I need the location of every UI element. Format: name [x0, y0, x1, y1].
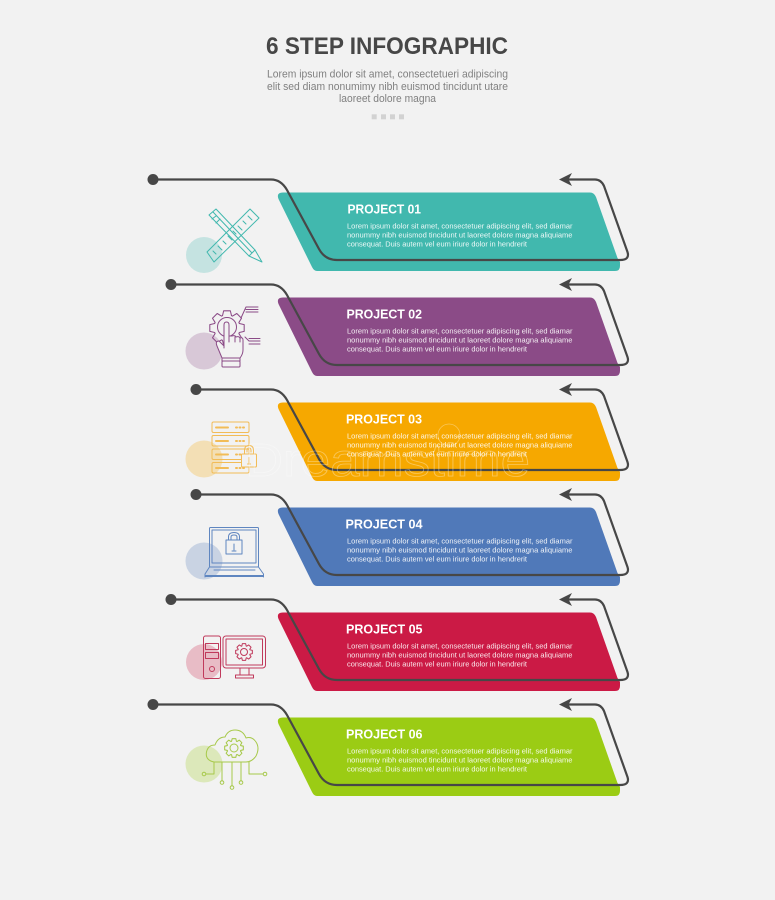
description: consequat. Duis autem vel eum iriure dolor in hendrerit	[347, 764, 527, 774]
title: 6 STEP INFOGRAPHIC	[266, 33, 508, 60]
icon: laptop with lock	[186, 528, 264, 580]
description	[347, 746, 573, 774]
connector line with arrow	[148, 173, 628, 260]
description: consequat. Duis autem vel eum iriure dolor in hendrerit	[347, 450, 527, 458]
subtitle text block: Lorem ipsum dolor sit amet, consectetueri adipiscing	[267, 68, 508, 80]
banner shape	[278, 192, 620, 271]
connector line with arrow	[166, 278, 628, 365]
banner shape	[278, 298, 620, 376]
description: nonummy nibh euismod tincidunt ut laoreet dolore magna aliquiame	[347, 650, 572, 660]
banner shape	[278, 718, 620, 796]
banner shape	[278, 612, 620, 691]
heading: PROJECT 05	[346, 622, 422, 636]
description: nonummy nibh euismod tincidunt ut laoreet dolore magna aliquiame	[347, 756, 572, 764]
pagination dots	[372, 114, 404, 119]
heading: PROJECT 04	[346, 516, 423, 532]
connector line with arrow	[166, 593, 628, 680]
connector line with arrow	[190, 488, 628, 575]
banner shape	[278, 508, 620, 586]
connector line with arrow	[148, 698, 628, 785]
description: nonummy nibh euismod tincidunt ut laoreet dolore magna aliquiame	[347, 230, 572, 240]
icon: desktop computer with gear	[186, 636, 266, 680]
panel: project 01	[148, 173, 628, 273]
icon: cloud circuit	[186, 730, 267, 789]
heading: PROJECT 03	[346, 412, 422, 426]
heading: PROJECT 02	[346, 306, 422, 322]
panel: project 05	[166, 593, 628, 691]
description: Lorem ipsum dolor sit amet, consectetuer adipiscing elit, sed diamar	[347, 536, 573, 546]
subtitle text block: laoreet dolore magna	[339, 93, 436, 105]
description	[347, 326, 573, 354]
description: consequat. Duis autem vel eum iriure dolor in hendrerit	[347, 660, 527, 668]
banner shape	[278, 402, 620, 481]
icon: server rack with lock	[186, 422, 256, 478]
description: Lorem ipsum dolor sit amet, consectetuer adipiscing elit, sed diamar	[347, 326, 573, 336]
description: consequat. Duis autem vel eum iriure dolor in hendrerit	[347, 554, 527, 564]
subtitle text block: elit sed diam nonumimy nibh euismod tincidunt utare	[267, 81, 508, 93]
description	[347, 222, 573, 248]
description	[347, 536, 573, 564]
heading: PROJECT 06	[346, 726, 422, 742]
description: nonummy nibh euismod tincidunt ut laoreet dolore magna aliquiame	[347, 546, 572, 554]
panel: project 02	[166, 278, 628, 376]
description: Lorem ipsum dolor sit amet, consectetuer adipiscing elit, sed diamar	[347, 432, 573, 440]
panel: project 04	[186, 488, 628, 586]
panel: project 06	[148, 698, 628, 796]
watermark: Dreamstime	[245, 434, 530, 486]
connector line with arrow	[190, 383, 628, 470]
subtitle text block	[267, 68, 508, 105]
description: Lorem ipsum dolor sit amet, consectetuer adipiscing elit, sed diamar	[347, 746, 573, 756]
icon: hand pressing gear	[186, 307, 260, 370]
icon: ruler and pencil	[186, 209, 262, 273]
heading: PROJECT 01	[348, 202, 421, 216]
description	[347, 432, 573, 458]
description: consequat. Duis autem vel eum iriure dolor in hendrerit	[347, 344, 527, 354]
panel: project 03	[186, 383, 628, 481]
description: nonummy nibh euismod tincidunt ut laoreet dolore magna aliquiame	[347, 440, 572, 450]
description	[347, 642, 573, 668]
description: Lorem ipsum dolor sit amet, consectetuer adipiscing elit, sed diamar	[347, 222, 573, 230]
description: Lorem ipsum dolor sit amet, consectetuer adipiscing elit, sed diamar	[347, 642, 573, 650]
description: nonummy nibh euismod tincidunt ut laoreet dolore magna aliquiame	[347, 336, 572, 344]
description: consequat. Duis autem vel eum iriure dolor in hendrerit	[347, 240, 527, 248]
